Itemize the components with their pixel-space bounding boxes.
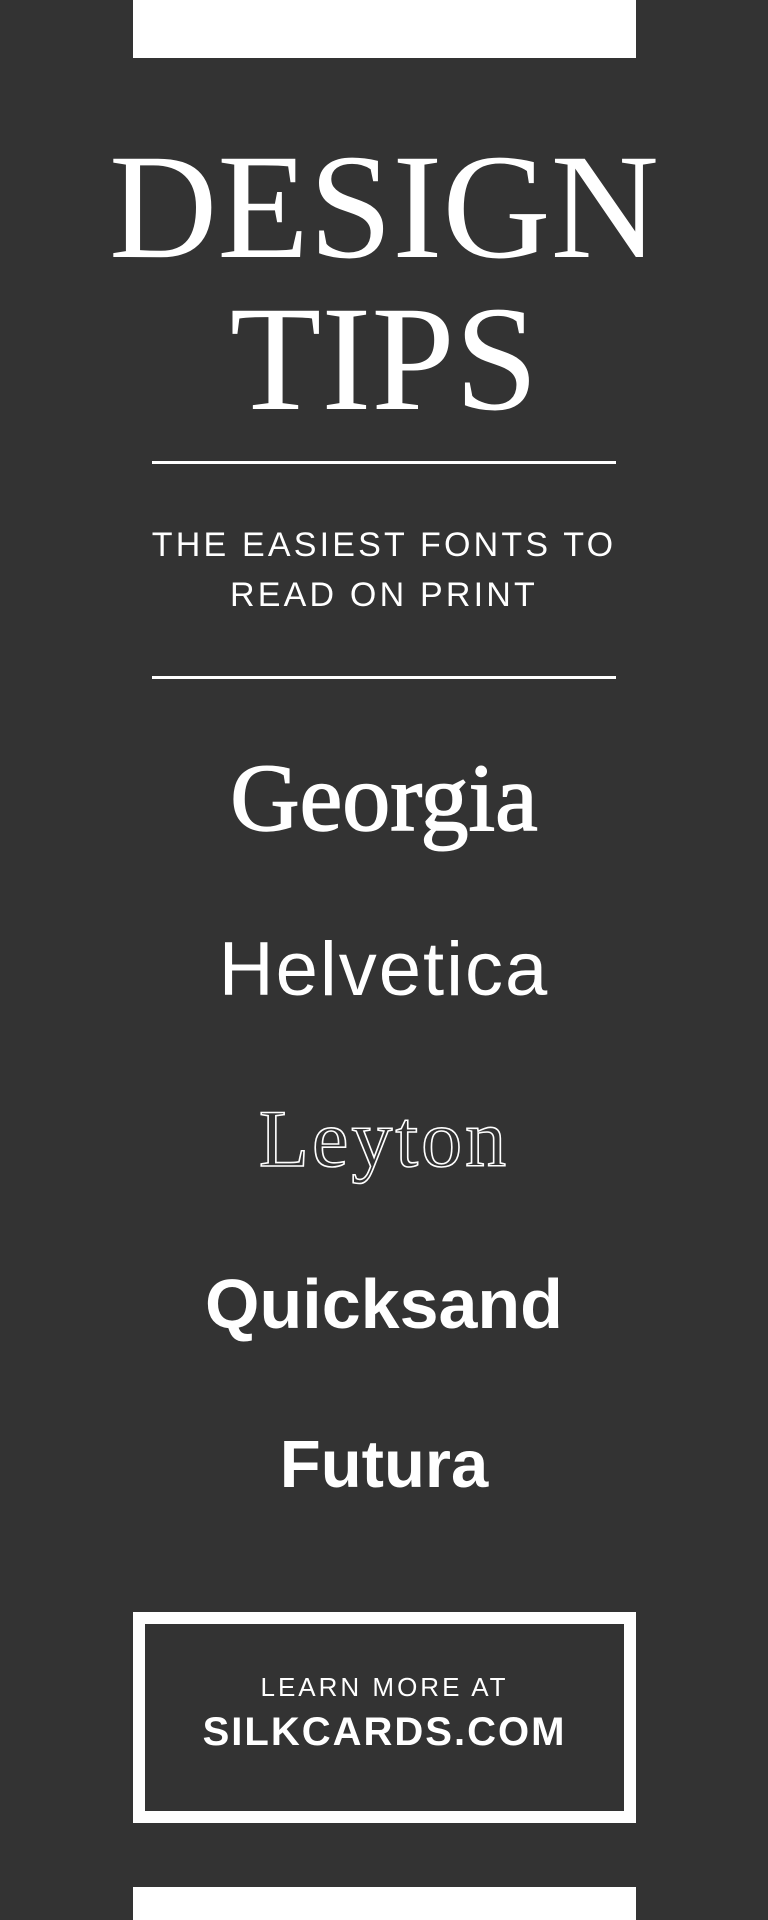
subtitle: THE EASIEST FONTS TO — [152, 526, 616, 564]
font: Georgia: Georgia — [230, 744, 538, 851]
font: Helvetica: Helvetica — [219, 927, 549, 1012]
font: Quicksand: Quicksand — [205, 1265, 563, 1343]
cta url: SILKCARDS.COM — [203, 1710, 566, 1754]
title line 2: TIPS — [230, 276, 538, 442]
title — [109, 124, 659, 442]
bottom white bar — [133, 1887, 636, 1920]
cta small text: LEARN MORE AT — [260, 1672, 508, 1702]
title line 1: DESIGN — [109, 124, 659, 290]
subtitle — [152, 526, 616, 614]
subtitle: READ ON PRINT — [230, 576, 538, 614]
call-to-action box — [133, 1612, 636, 1823]
font: Futura: Futura — [280, 1427, 488, 1502]
top white bar — [133, 0, 636, 58]
font list — [205, 744, 563, 1502]
